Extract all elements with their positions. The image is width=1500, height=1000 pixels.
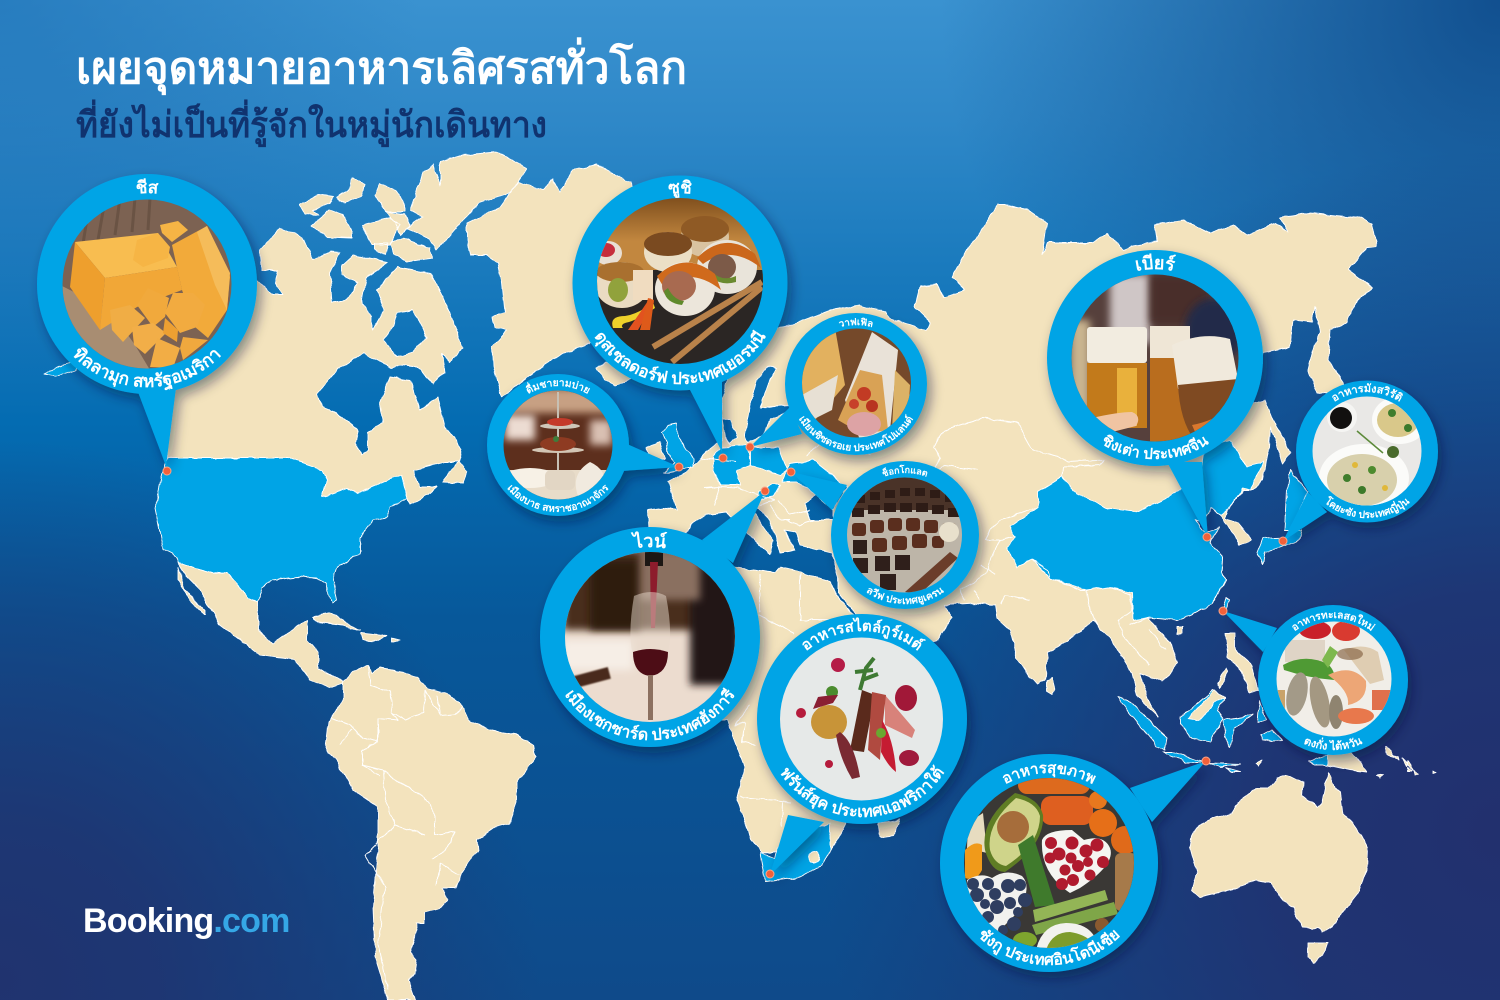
bottom label: ชังกู ประเทศอินโดนีเซีย xyxy=(980,930,1120,966)
callout shape xyxy=(750,313,927,455)
photo: sushi xyxy=(594,196,765,370)
USA xyxy=(155,458,408,603)
pin xyxy=(675,463,683,471)
pin xyxy=(163,467,171,475)
Africa xyxy=(640,560,900,853)
Pacific islands xyxy=(1255,747,1435,778)
photo: seafood xyxy=(1275,620,1393,738)
subtitle: ที่ยังไม่เป็นที่รู้จักในหมู่นักเดินทาง xyxy=(76,99,547,148)
Borneo north xyxy=(1188,690,1225,720)
Indonesia (highlighted) xyxy=(1117,690,1327,772)
bottom label: เมืองเซกซาร์ด ประเทศฮังการี xyxy=(566,687,734,740)
Africa borders xyxy=(735,573,830,827)
bottom label: ชิงเต่า ประเทศจีน xyxy=(1104,434,1209,460)
panel: beer xyxy=(1042,248,1274,544)
photo: healthy food xyxy=(962,776,1139,950)
photo: chocolate xyxy=(845,476,965,594)
China xyxy=(1007,440,1263,620)
panel: seafood xyxy=(1218,605,1415,769)
photo: cheese xyxy=(60,198,235,370)
callout shape xyxy=(791,461,979,609)
Alaska (highlighted) xyxy=(43,360,80,376)
pin xyxy=(1202,757,1210,765)
Arctic islands xyxy=(300,152,527,483)
panel: healthy food xyxy=(940,754,1210,982)
Taiwan xyxy=(1222,598,1230,613)
Ireland xyxy=(647,442,665,460)
South America xyxy=(325,665,535,1000)
Eurasia xyxy=(648,205,1377,717)
pin xyxy=(719,454,727,462)
panel: wine xyxy=(539,486,772,758)
Europe borders xyxy=(700,425,870,525)
photo: beer xyxy=(1070,274,1245,448)
panel: waffle xyxy=(746,311,939,469)
photo: waffle xyxy=(800,328,914,440)
panel: vegetarian xyxy=(1278,380,1446,546)
photo: gourmet plate xyxy=(778,636,946,802)
North America mainland xyxy=(167,228,463,505)
callout shape xyxy=(572,176,788,452)
Caribbean islands xyxy=(313,613,400,642)
bottom label: เมืองบาธ สหราชอาณาจักร xyxy=(508,484,608,512)
top label: ดื่มชายามบ่าย xyxy=(526,380,590,394)
Tasmania xyxy=(1308,943,1327,963)
pin xyxy=(766,870,774,878)
Southeast Asia islands xyxy=(1047,627,1258,695)
Australia xyxy=(1190,772,1368,932)
South America borders xyxy=(332,665,463,990)
Mexico and Central America xyxy=(178,563,345,688)
pin xyxy=(1203,533,1211,541)
top label: ชีส xyxy=(136,178,158,194)
United Kingdom xyxy=(662,423,693,473)
panel: gourmet xyxy=(752,612,976,881)
top label: ซูชิ xyxy=(668,179,692,198)
bottom label: ดุสเซลดอร์ฟ ประเทศเยอรมนี xyxy=(594,330,766,384)
callout shape xyxy=(540,491,765,747)
photo: vegetarian food xyxy=(1312,396,1422,506)
Madagascar xyxy=(878,820,900,837)
South Africa xyxy=(760,823,830,882)
callout shape xyxy=(940,754,1206,972)
Lesotho xyxy=(809,852,819,862)
callout shape xyxy=(1223,605,1408,755)
callout shape xyxy=(487,374,679,516)
world map xyxy=(43,152,1435,1000)
pin xyxy=(746,443,754,451)
callout shape xyxy=(1047,250,1263,538)
Asian borders xyxy=(930,418,1165,665)
pin xyxy=(761,487,769,495)
photo: wine xyxy=(563,550,740,724)
heading xyxy=(76,37,687,148)
panel: sushi xyxy=(568,176,798,462)
top label: อาหารสุขภาพ xyxy=(1002,764,1096,784)
callout shape xyxy=(757,614,967,875)
Europe highlighted countries xyxy=(713,445,847,510)
bottom label: ทิลลามุก สหรัฐอเมริกา xyxy=(74,347,221,390)
panel: chocolate xyxy=(786,458,992,623)
New Guinea xyxy=(1327,745,1367,772)
top label: อาหารทะเลสดใหม่ xyxy=(1292,612,1376,632)
Greenland xyxy=(467,165,660,397)
top label: อาหารสไตล์กูร์เมต์ xyxy=(802,617,926,651)
pin xyxy=(1279,537,1287,545)
top label: ช็อกโกแลต xyxy=(882,464,928,477)
bottom label: เมียนซิซดรอเย ประเทศโปแลนด์ xyxy=(799,414,914,452)
title: เผยจุดหมายอาหารเลิศรสทั่วโลก xyxy=(76,37,687,96)
bottom label: โคยะซัง ประเทศญี่ปุ่น xyxy=(1326,496,1410,518)
pin xyxy=(1219,607,1227,615)
logo: Booking.com: Booking.com xyxy=(83,902,290,940)
top label: วาฟเฟิล xyxy=(838,318,873,328)
top label: ไวน์ xyxy=(630,531,668,548)
photo: afternoon tea xyxy=(504,390,612,500)
callout shape xyxy=(37,174,257,466)
pin xyxy=(787,468,795,476)
Iceland xyxy=(597,362,640,385)
panel: cheese xyxy=(36,174,270,476)
bottom label: ฟรันส์ฮุค ประเทศแอฟริกาใต้ xyxy=(780,764,944,818)
top label: อาหารมังสวิรัติ xyxy=(1332,383,1403,402)
panel: tea xyxy=(486,374,684,527)
bottom label: ตงกั่ง ไต้หวัน xyxy=(1304,737,1362,750)
Japan xyxy=(1257,470,1308,565)
top label: เบียร์ xyxy=(1136,253,1176,271)
callout shape xyxy=(1283,380,1438,541)
bottom label: ลวีฟ ประเทศยูเครน xyxy=(866,588,944,605)
